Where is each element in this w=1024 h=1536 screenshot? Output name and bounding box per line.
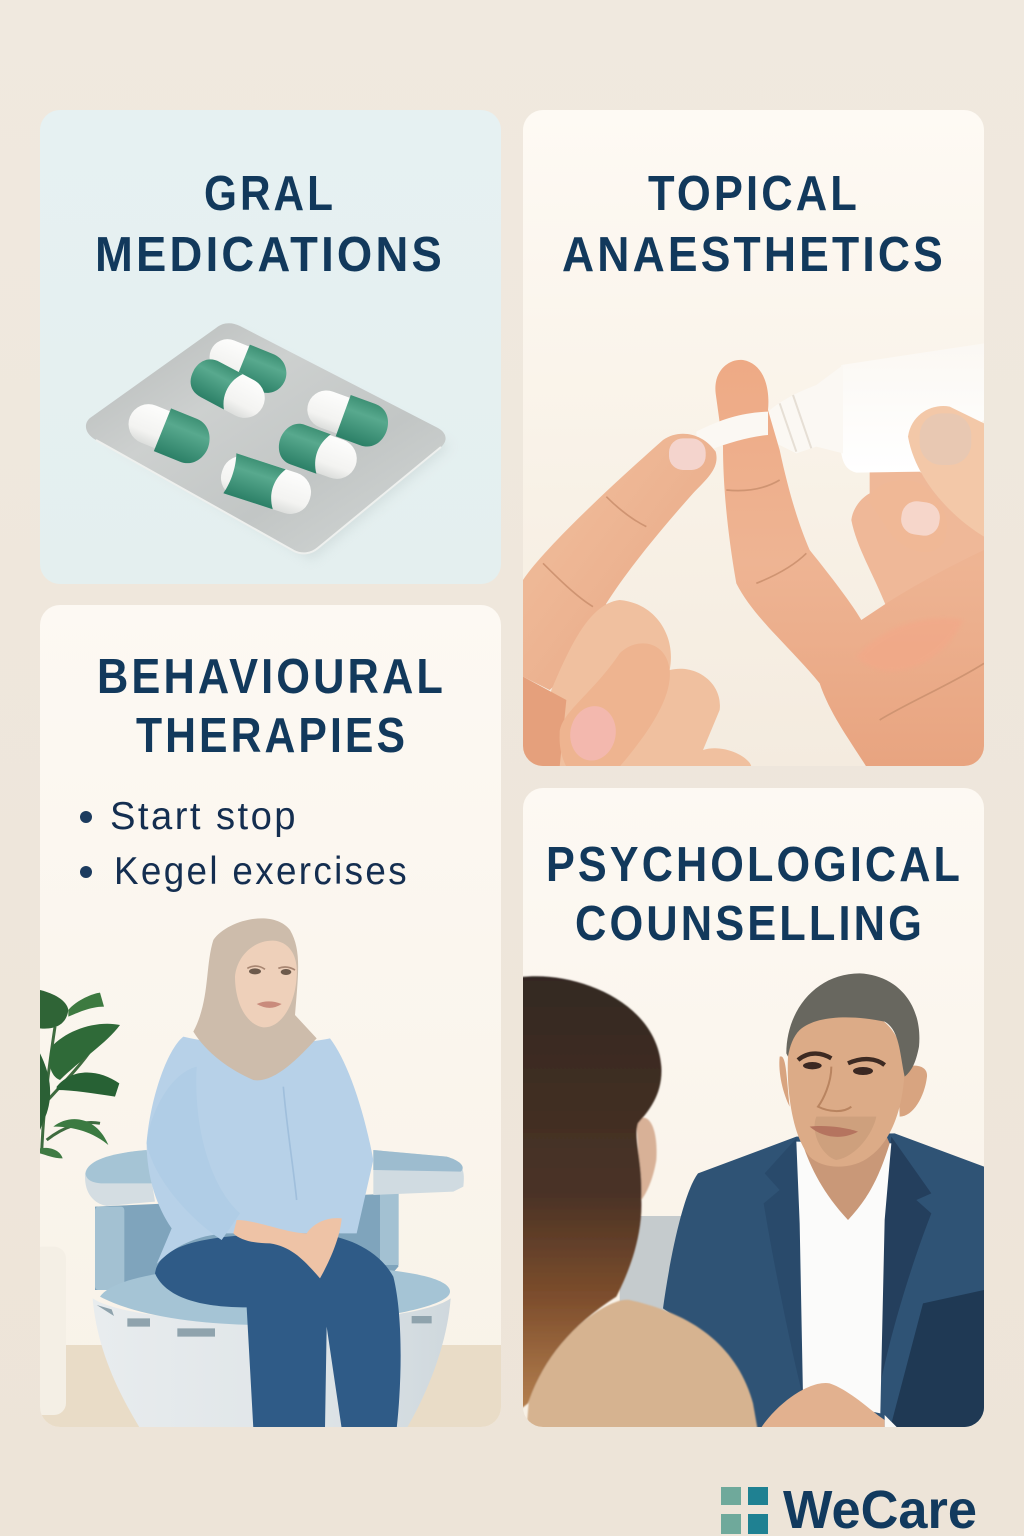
- panel background: [523, 110, 984, 586]
- heading: psychological counselling: [548, 846, 959, 940]
- hands: [233, 1218, 342, 1278]
- image: hands applying cream from tube: [523, 343, 984, 767]
- face: [788, 1006, 905, 1167]
- heading: oral medications: GRAL: [204, 167, 336, 221]
- ear: [898, 1066, 927, 1117]
- panel: topical anaesthetics: [523, 110, 984, 767]
- heading: behavioural therapies: THERAPIES: [136, 709, 408, 763]
- heading: topical anaesthetics: ANAESTHETICS: [562, 228, 946, 282]
- panel background: [40, 110, 501, 584]
- face: [235, 941, 297, 1027]
- vase: [40, 1345, 66, 1415]
- panel background: [40, 605, 501, 1427]
- heading: topical anaesthetics: [563, 176, 942, 272]
- hair: [786, 973, 919, 1077]
- middle finger: [715, 360, 984, 767]
- eyes and mouth: [798, 1054, 885, 1065]
- image: blister pack with capsules: [86, 323, 450, 560]
- right thumb: [908, 406, 984, 537]
- heading: topical anaesthetics: TOPICAL: [648, 167, 860, 221]
- left index finger: [523, 434, 717, 690]
- left curled fingers: [536, 600, 751, 767]
- hands: [760, 1383, 885, 1430]
- panel: oral medications: [40, 110, 501, 584]
- hijab: [193, 918, 317, 1080]
- floor: [40, 1345, 501, 1428]
- bullet list: Start stop: [110, 795, 298, 838]
- tube: [766, 343, 984, 473]
- logo: WeCare: [721, 1480, 977, 1536]
- image: woman on pelvic floor chair: [30, 918, 501, 1428]
- heading: behavioural therapies: [100, 658, 442, 752]
- capsule 4: [307, 390, 388, 446]
- heading: oral medications: MEDICATIONS: [95, 228, 445, 282]
- panel: psychological counselling: [520, 788, 984, 1432]
- heading: oral medications: [98, 176, 440, 272]
- bullet list: [80, 795, 409, 893]
- logo mark: [721, 1487, 768, 1534]
- sweater: [147, 1037, 373, 1264]
- image: counsellor and client: [520, 973, 984, 1432]
- shirt: [796, 1142, 891, 1413]
- heading: behavioural therapies: BEHAVIOURAL: [97, 650, 446, 704]
- capsule 1: [210, 339, 286, 393]
- right finger nail tip: [868, 480, 947, 552]
- bullet list: Kegel exercises: [114, 850, 409, 893]
- counsellor suit: [663, 1133, 984, 1430]
- plant: [40, 990, 120, 1158]
- chair: [85, 1150, 464, 1428]
- neck: [801, 1113, 890, 1220]
- panel: behavioural therapies: [30, 605, 501, 1428]
- heading: psychological counselling: PSYCHOLOGICAL: [546, 838, 963, 892]
- sofa: [620, 1216, 686, 1323]
- trousers: [155, 1233, 401, 1428]
- capsule 3: [128, 404, 210, 464]
- capsule 6: [221, 453, 311, 514]
- client with blurred back view: [520, 976, 758, 1432]
- cream: [696, 412, 768, 450]
- capsule 2: [190, 359, 265, 418]
- right hand back finger: [851, 472, 984, 607]
- panel background: [523, 788, 984, 1427]
- capsule 5: [278, 424, 357, 479]
- heading: psychological counselling: COUNSELLING: [575, 897, 925, 951]
